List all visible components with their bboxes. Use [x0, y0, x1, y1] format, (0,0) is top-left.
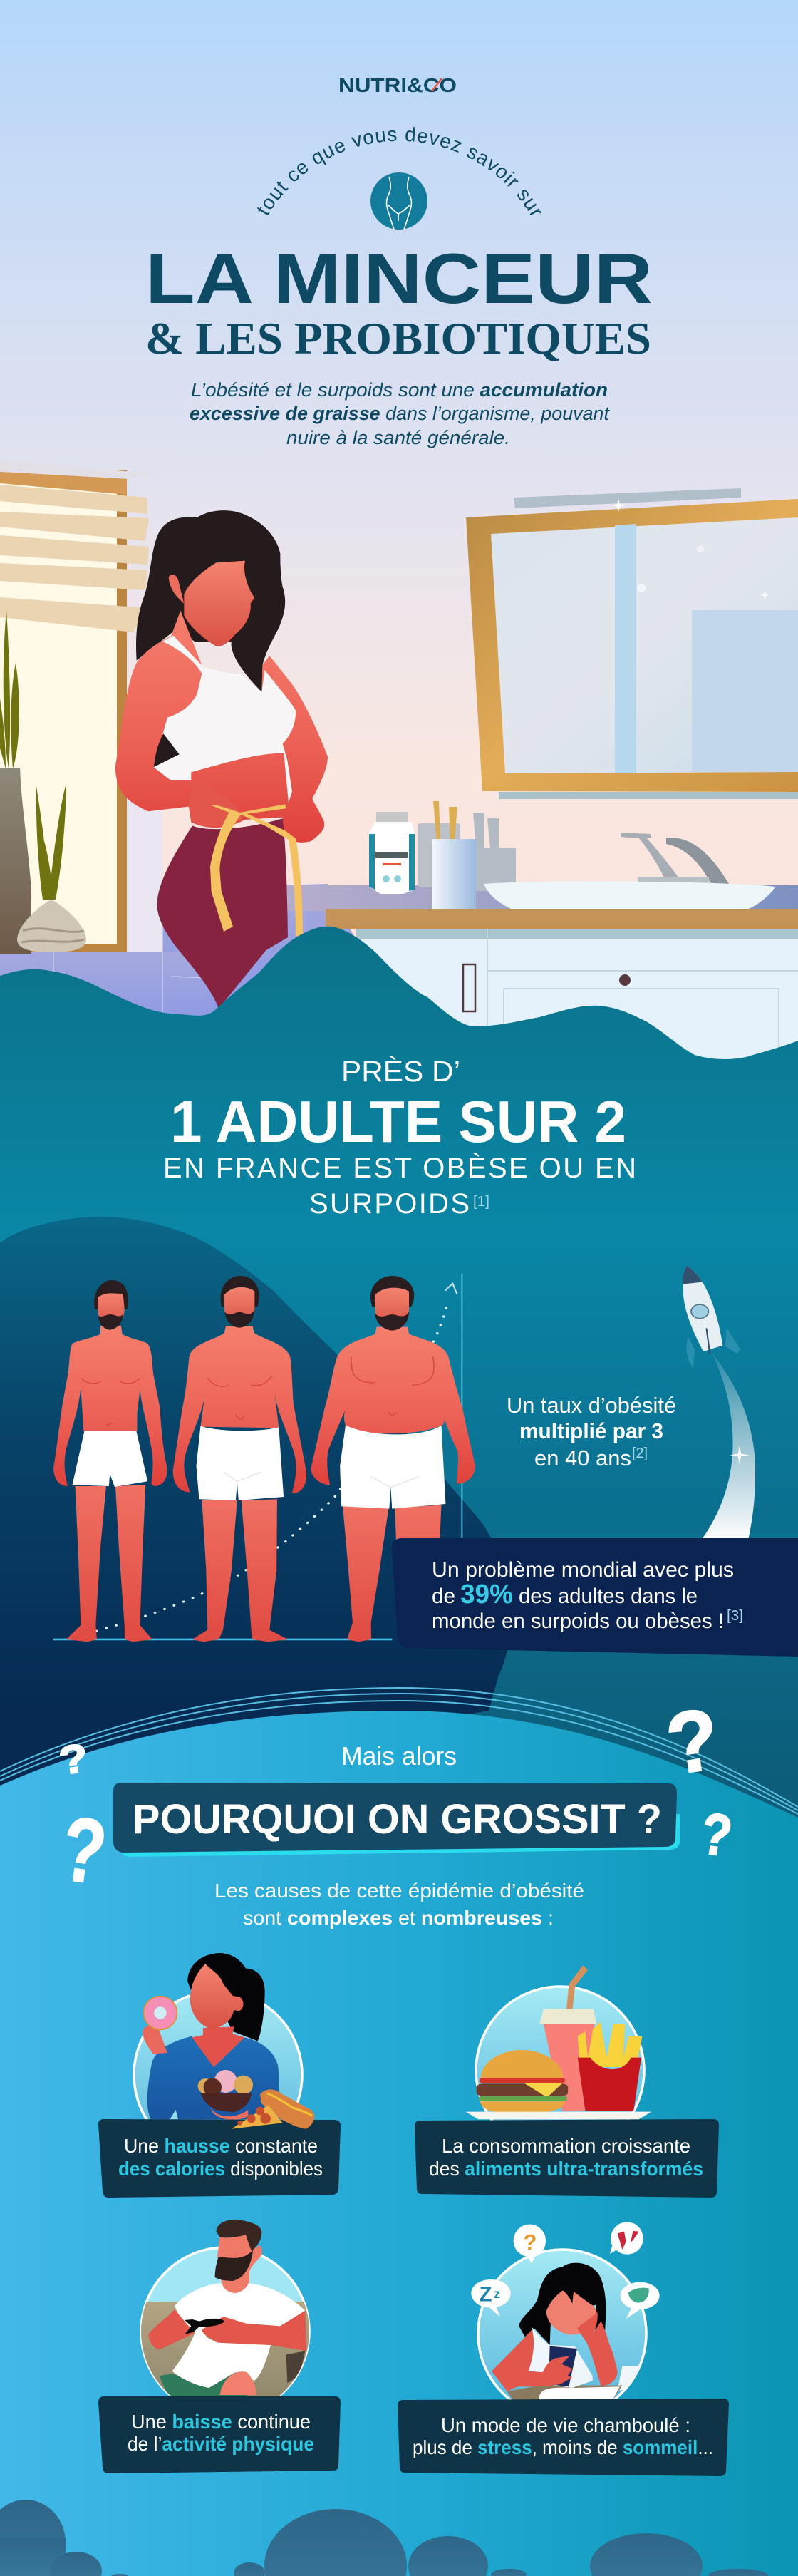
man 1: normal weight [53, 1280, 167, 1642]
causes intro text: sont complexes et nombreuses : [243, 1907, 554, 1929]
bottom clouds [0, 2500, 769, 2576]
rocket trail [701, 1354, 755, 1540]
world problem callout [392, 1538, 798, 1657]
intro paragraph: nuire à la santé générale. [286, 427, 510, 448]
logo: NUTRI&CO [338, 74, 457, 96]
left hand [189, 780, 242, 827]
caption 2 [415, 2119, 719, 2198]
world problem callout: [3] [727, 1608, 743, 1624]
intro paragraph: excessive de graisse dans l’organisme, pouvant [190, 403, 610, 424]
plant in tall vase [0, 610, 31, 954]
rocket [683, 1266, 755, 1540]
question marks [56, 1690, 736, 1905]
window [0, 460, 155, 952]
three men of increasing weight [53, 1276, 475, 1642]
sink [484, 882, 776, 911]
man 3: obese [311, 1276, 475, 1642]
world problem callout: Un problème mondial avec plus [432, 1558, 734, 1582]
speech bubbles: Z [480, 2282, 492, 2306]
man's head and game controller [185, 2220, 262, 2334]
woman eating [142, 1953, 280, 2120]
sofa and man's body [141, 2283, 309, 2396]
obesity rate note: multiplié par 3 [519, 1418, 663, 1443]
bowl of sweets [214, 2070, 237, 2093]
white crop top [154, 636, 296, 803]
mirror [466, 488, 798, 799]
headline: pres d'un adulte sur deux [163, 1055, 636, 1220]
faucet [621, 833, 729, 884]
section: statistics background with wave [0, 927, 798, 1839]
headline: pres d'un adulte sur deux: EN FRANCE EST OBÈSE OU EN [163, 1152, 636, 1184]
headline: pres d'un adulte sur deux: SURPOIDS [309, 1188, 470, 1220]
toothbrushes and grey holder [418, 801, 516, 891]
mais alors: Mais alors [341, 1741, 457, 1771]
hair seen behind arm [154, 733, 180, 767]
back counter band [282, 885, 798, 911]
drinking cup [432, 839, 476, 910]
world problem callout: des adultes dans le [519, 1585, 698, 1608]
face [184, 561, 254, 646]
plant in small vase [17, 783, 86, 952]
dark blob behind men [0, 1217, 510, 1796]
caption 3: de l’activité physique [128, 2433, 314, 2455]
world problem callout: 39% [460, 1580, 513, 1609]
stressed woman with phone [492, 2263, 641, 2400]
causes intro text [214, 1880, 584, 1929]
chart axes and dotted growth curve [53, 1274, 462, 1639]
curved subtitle: tout ce que vous devez savoir sur [257, 127, 542, 215]
window blinds [0, 460, 155, 632]
bathroom scene [0, 460, 798, 1071]
cause 2: processed foods [466, 1965, 651, 2155]
headline: pres d'un adulte sur deux: 1 ADULTE SUR 2 [170, 1088, 626, 1155]
caption 4: plus de stress, moins de sommeil... [413, 2436, 713, 2458]
icon: slim waist badge [370, 172, 428, 230]
subtitle: les probiotiques: & LES PROBIOTIQUES [145, 313, 651, 364]
intro paragraph [190, 379, 610, 448]
fast food meal [466, 1965, 651, 2119]
speech bubbles: ? [524, 2230, 537, 2255]
probiotic bottle [369, 812, 415, 894]
heading banner: pourquoi on grossit: POURQUOI ON GROSSIT ? [133, 1796, 662, 1843]
caption 2: La consommation croissante [442, 2135, 690, 2157]
man 2: overweight [173, 1276, 306, 1642]
woman measuring waist [115, 510, 328, 1009]
obesity rate note [507, 1393, 676, 1470]
hair front lock [232, 561, 280, 692]
section: causes blue dome [0, 1688, 798, 2576]
measuring tape [210, 804, 303, 936]
leggings [157, 818, 288, 1009]
hand and donut [142, 2026, 167, 2054]
headline: pres d'un adulte sur deux: [1] [473, 1194, 489, 1210]
skin of torso and arms [115, 611, 328, 843]
question marks: ? [56, 1735, 90, 1783]
obesity rate note: Un taux d’obésité [507, 1393, 676, 1418]
intro paragraph: L’obésité et le surpoids sont une accumulation [191, 379, 608, 401]
hair back [136, 510, 285, 692]
causes intro text: Les causes de cette épidémie d’obésité [214, 1880, 584, 1902]
cause 4: disrupted lifestyle [471, 2222, 660, 2418]
caption 4: Un mode de vie chamboulé : [441, 2414, 690, 2436]
world problem callout: monde en surpoids ou obèses ! [432, 1609, 724, 1633]
caption 3: Une baisse continue [131, 2411, 311, 2433]
headline: pres d'un adulte sur deux: PRÈS D’ [341, 1055, 460, 1088]
caption 2: des aliments ultra-transformés [429, 2158, 703, 2180]
question marks: ? [698, 1801, 736, 1870]
circle backdrop [134, 1991, 302, 2159]
speech bubbles: z [494, 2287, 500, 2301]
icon: hot dog and pizza slice [232, 2089, 314, 2129]
obesity rate note: [2] [632, 1446, 648, 1461]
world problem callout: de [432, 1585, 455, 1608]
caption 3 [98, 2396, 341, 2473]
sky and wall background [0, 0, 798, 1069]
question marks: ? [56, 1798, 112, 1905]
cause 3: lack of physical activity [141, 2220, 309, 2416]
heading banner: pourquoi on grossit [113, 1783, 680, 1857]
title: la minceur: LA MINCEUR [145, 239, 653, 318]
obesity rate note: en 40 ans [534, 1446, 631, 1470]
ear [169, 575, 184, 604]
floor and lower wall tiles [0, 884, 399, 1038]
speech bubbles [471, 2222, 660, 2319]
cause 1: calories [134, 1953, 302, 2159]
caption 1: Une hausse constante [124, 2135, 318, 2157]
cabinet [356, 929, 798, 1071]
question marks: ? [660, 1690, 725, 1793]
wall strip beside window [127, 642, 162, 952]
counter top [326, 909, 798, 929]
caption 1 [98, 2119, 341, 2198]
caption 4 [398, 2399, 729, 2476]
caption 1: des calories disponibles [118, 2158, 323, 2180]
